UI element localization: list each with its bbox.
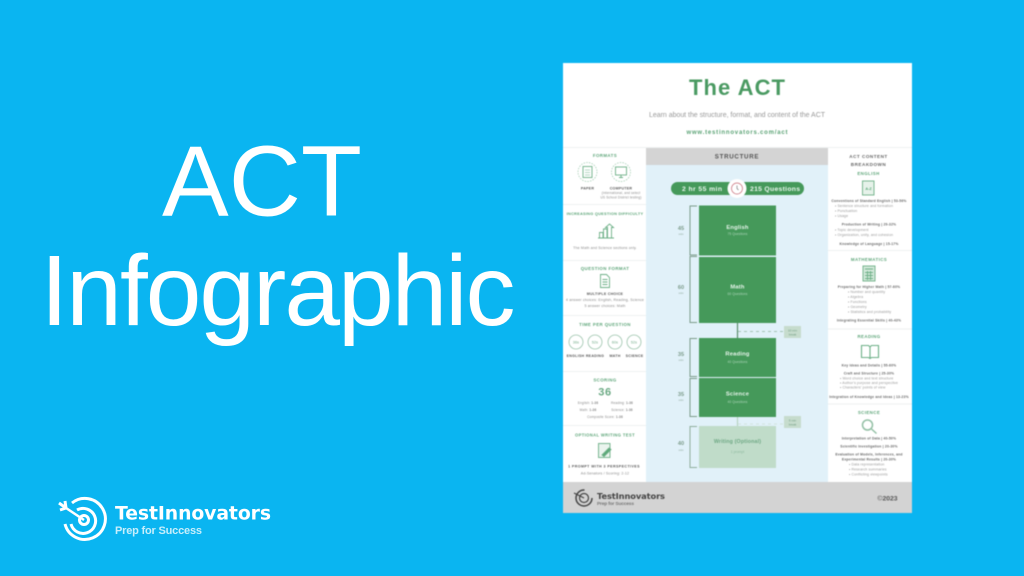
minutes labels: min [679, 232, 684, 236]
section: Mathematics: • Algebra [848, 295, 863, 299]
break callout: 10 min: 10 min [788, 328, 797, 332]
panel: structure [646, 148, 828, 482]
poster subtitle: Learn about the structure, format, and content of the ACT [649, 112, 826, 119]
copyright: ©2023 [877, 494, 898, 502]
panel: optional writing test: 1 PROMPT WITH 3 PERSPECTIVES [568, 464, 640, 468]
logo wordmark: TestInnovators [115, 504, 271, 524]
break callout: 5 min: break [789, 422, 797, 426]
section: Reading: Craft and Structure | 25-30% [844, 372, 894, 376]
panel: formats: (international, and select [602, 191, 640, 195]
icon: calculator [863, 266, 875, 281]
panel: optional writing test [568, 432, 640, 476]
poster background [563, 63, 912, 513]
panel: time per question: READING [586, 354, 604, 358]
block: English: 75 Questions [728, 232, 748, 236]
title [40, 126, 516, 347]
block: Reading: 40 Questions [728, 360, 748, 364]
section: English [831, 171, 907, 246]
break callout: 10 min [784, 326, 801, 338]
infographic poster [563, 63, 912, 513]
section: Science: • Conflicting viewpoints [849, 472, 888, 476]
block: Math: Math [730, 284, 745, 290]
minutes labels: 60 [678, 285, 684, 291]
panel: scoring: English: 1-36 [578, 401, 598, 405]
poster heading [649, 75, 826, 136]
minutes labels [678, 226, 684, 452]
panel: time per question: 52s [631, 340, 637, 344]
icon: document [600, 274, 610, 288]
minutes labels: min [679, 291, 684, 295]
section: Reading: • Characters' points of view [840, 386, 886, 390]
section: Reading: Key Ideas and Details | 55-60% [842, 364, 896, 368]
panel: scoring: Science: 1-36 [611, 408, 633, 412]
block: Writing (Optional) [699, 426, 776, 468]
panel: ACT content breakdown [829, 154, 909, 476]
section: Reading: • Author's purpose and perspective [840, 381, 898, 385]
panel: scoring: SCORING [593, 378, 617, 382]
footer tagline: Prep for Success [597, 501, 634, 507]
section: English: ENGLISH [857, 171, 880, 176]
break callout: 5 min [784, 416, 801, 428]
minutes labels: min [679, 398, 684, 402]
minutes labels: min [679, 358, 684, 362]
section: Science: • Research summaries [849, 468, 887, 472]
section: Mathematics: Integrating Essential Skills | 40-43% [837, 318, 901, 322]
break callout: 10 min: break [789, 332, 797, 336]
logo tagline: Prep for Success [115, 525, 202, 537]
panel: question format: QUESTION FORMAT [581, 266, 629, 271]
section: Science: Experimental Results | 20-30% [842, 458, 896, 462]
connector lines [736, 323, 738, 338]
minutes labels: 45 [678, 226, 684, 232]
panel: formats: US School District testing) [600, 196, 642, 200]
block: Science: Science [726, 392, 750, 398]
panel: ACT content breakdown: BREAKDOWN [851, 162, 886, 167]
time and question pill [671, 179, 804, 198]
section: English: Knowledge of Language | 15-17% [839, 242, 899, 246]
block: Math [699, 257, 776, 323]
section: English: • Topic development [835, 228, 869, 232]
panel: question format [566, 266, 644, 308]
panel: formats: PAPER [581, 186, 594, 190]
block: Math: 60 Questions [728, 292, 748, 296]
icon: computer [612, 162, 630, 182]
time and question pill: 2 hr 55 min [682, 186, 722, 193]
icon: paper [578, 162, 597, 182]
block: Reading: Reading [725, 352, 750, 358]
minutes labels: min [679, 448, 684, 452]
time and question pill: 215 Questions [750, 186, 800, 193]
section: Reading: • Word choice and text structure [840, 376, 893, 380]
panel: ACT content breakdown: ACT CONTENT [849, 154, 888, 159]
block: Writing (Optional): 1 prompt [731, 450, 744, 454]
block: Science [699, 378, 776, 417]
section: English: • Organization, unity, and cohesion [835, 233, 893, 237]
footer logo icon [574, 490, 592, 506]
panel: formats [578, 153, 642, 200]
footer wordmark: TestInnovators [597, 491, 665, 501]
title: Infographic [40, 235, 516, 347]
panel: formats: FORMATS [593, 153, 617, 158]
section: Reading [829, 334, 909, 399]
section: English: Production of Writing | 29-32% [842, 222, 896, 226]
block: English: English [726, 225, 749, 231]
section: English: • Punctuation [835, 209, 857, 213]
section: Mathematics: • Statistics and probability [848, 310, 891, 314]
panel: increasing question difficulty: The Math and Science sections only. [573, 246, 637, 250]
section: Mathematics [837, 257, 901, 322]
icon: rising bars [598, 224, 614, 238]
section: Mathematics: Preparing for Higher Math | 57-60% [838, 285, 900, 289]
section: Science [835, 410, 903, 476]
section: Science: Scientific Investigation | 20-30% [840, 444, 898, 448]
break callout: 5 min: 5 min [789, 418, 796, 422]
panel: question format: MULTIPLE CHOICE [587, 292, 624, 296]
panel: time per question: ENGLISH [567, 354, 585, 358]
brackets [690, 206, 697, 416]
icon: target with arrow [59, 498, 105, 539]
logo: TestInnovators [59, 498, 271, 539]
section: Reading: Integration of Knowledge and Ideas | 13-23% [829, 395, 909, 399]
section: English: • Usage [835, 214, 848, 218]
panel: time per question [567, 322, 644, 358]
panel: formats: COMPUTER [610, 186, 632, 190]
panel: scoring [578, 378, 633, 419]
minutes labels: 35 [678, 352, 684, 358]
panel: scoring: Math: 1-36 [580, 408, 596, 412]
panel: time per question: TIME PER QUESTION [579, 322, 631, 327]
block: Science: 40 Questions [728, 400, 748, 404]
section: Reading: READING [857, 334, 881, 339]
section: Mathematics: • Number and quantity [848, 290, 885, 294]
panel: time per question: SCIENCE [626, 354, 644, 358]
panel: time per question: 36s [573, 340, 579, 344]
panel: structure: STRUCTURE [715, 154, 759, 160]
poster url: www.testinnovators.com/act [686, 130, 788, 136]
panel: scoring: 36 [598, 386, 612, 398]
panel: scoring: Composite Score: 1-36 [587, 415, 623, 419]
section: English: • Sentence structure and formation [835, 204, 893, 208]
block: English [699, 206, 776, 256]
panel: left column dividers [563, 148, 912, 426]
section: Mathematics: MATHEMATICS [851, 257, 887, 262]
block: Reading [699, 338, 776, 377]
section: Science: Evaluation of Models, Inferences, and [835, 452, 903, 456]
panel: optional writing test: OPTIONAL WRITING TEST [575, 432, 635, 438]
panel: time per question: MATH [609, 354, 621, 358]
section: Science: SCIENCE [858, 410, 880, 415]
panel: time per question: 60s [612, 340, 618, 344]
panel: time per question: 52s [592, 340, 598, 344]
panel: optional writing test: Ad-Senators / Scoring: 2-12 [581, 472, 629, 476]
panel: question format: 5 answer choices: Math [584, 304, 626, 308]
icon: A-Z book [862, 181, 874, 195]
section: Mathematics: • Geometry [848, 305, 867, 309]
icon: pencil on paper [598, 444, 611, 458]
section: English: Conventions of Standard English | 53-56% [831, 199, 907, 203]
icon: magnifying glass [862, 420, 876, 434]
structure background [646, 165, 828, 482]
minutes labels: 35 [678, 392, 684, 398]
section: Science: • Data representation [849, 462, 884, 466]
structure heading bar [646, 148, 828, 165]
block: Writing (Optional): Writing (Optional) [714, 439, 761, 445]
minutes labels: 40 [678, 441, 684, 447]
section: Science: Interpretation of Data | 40-50% [842, 436, 896, 440]
panel: increasing question difficulty [567, 211, 644, 250]
icon: open book [862, 346, 878, 358]
panel: scoring: Reading: 1-36 [611, 401, 633, 405]
title: ACT [162, 126, 362, 238]
poster title: The ACT [689, 75, 786, 100]
panel: question format: 4 answer choices: English, Reading, Science [566, 298, 644, 302]
section: English: A-Z [865, 187, 872, 191]
poster footer [563, 482, 912, 513]
panel: increasing question difficulty: INCREASING QUESTION DIFFICULTY [567, 211, 644, 216]
section: Mathematics: • Functions [848, 300, 867, 304]
